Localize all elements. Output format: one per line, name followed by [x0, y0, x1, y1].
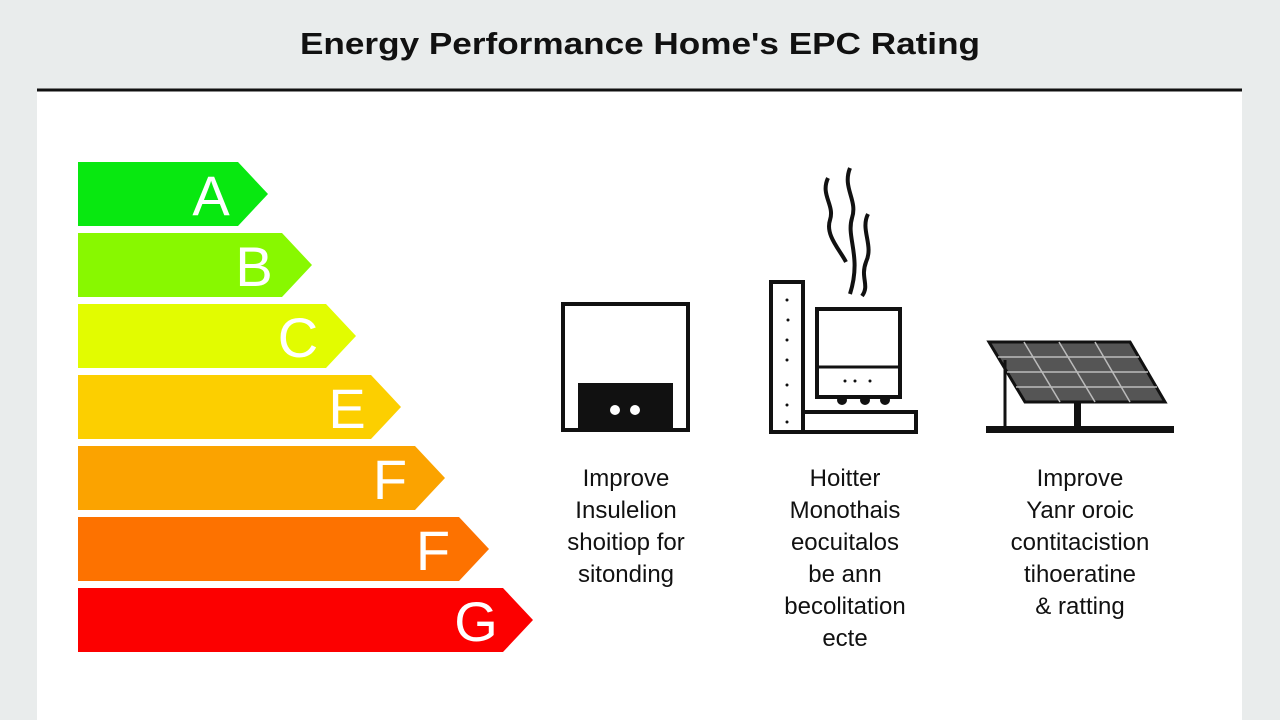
- bar F2: [78, 517, 489, 582]
- bar F: F: [373, 448, 407, 511]
- bar C: [78, 304, 356, 369]
- text: column 1: Improve: [583, 465, 669, 492]
- text: column 1: sitonding: [578, 561, 674, 588]
- text: column 1: [567, 465, 685, 588]
- text: column 3: [1011, 465, 1149, 620]
- icon: solar panel: [986, 342, 1174, 433]
- text: column 2: Hoitter: [810, 465, 880, 492]
- bar F2: F: [416, 519, 450, 582]
- bar A: A: [192, 164, 230, 227]
- text: column 3: Improve: [1037, 465, 1123, 492]
- text: column 3: contitacistion: [1011, 529, 1149, 556]
- text: column 2: becolitation: [784, 593, 906, 620]
- icon: boiler with steam: [771, 168, 916, 432]
- bar B: [78, 233, 312, 298]
- text: column 2: [784, 465, 906, 652]
- text: column 1: shoitiop for: [567, 529, 685, 556]
- bar F: [78, 446, 445, 511]
- EPC rating bars: [78, 162, 533, 653]
- bar B: B: [235, 235, 273, 298]
- text: column 3: Yanr oroic: [1026, 497, 1134, 524]
- text: column 2: Monothais: [790, 497, 900, 524]
- bar E: E: [328, 377, 366, 440]
- text: column 3: tihoeratine: [1024, 561, 1136, 588]
- text: column 1: Insulelion: [575, 497, 677, 524]
- bar A: [78, 162, 268, 227]
- bar G: [78, 588, 533, 653]
- text: column 2: be ann: [808, 561, 882, 588]
- text: column 3: & ratting: [1035, 593, 1125, 620]
- text: column 2: eocuitalos: [791, 529, 899, 556]
- title: Energy Performance Home's EPC Rating: [300, 26, 980, 61]
- text: column 2: ecte: [822, 625, 868, 652]
- bar G: G: [454, 590, 498, 653]
- bar E: [78, 375, 401, 440]
- bar C: C: [278, 306, 318, 369]
- icon: insulation box: [563, 304, 688, 432]
